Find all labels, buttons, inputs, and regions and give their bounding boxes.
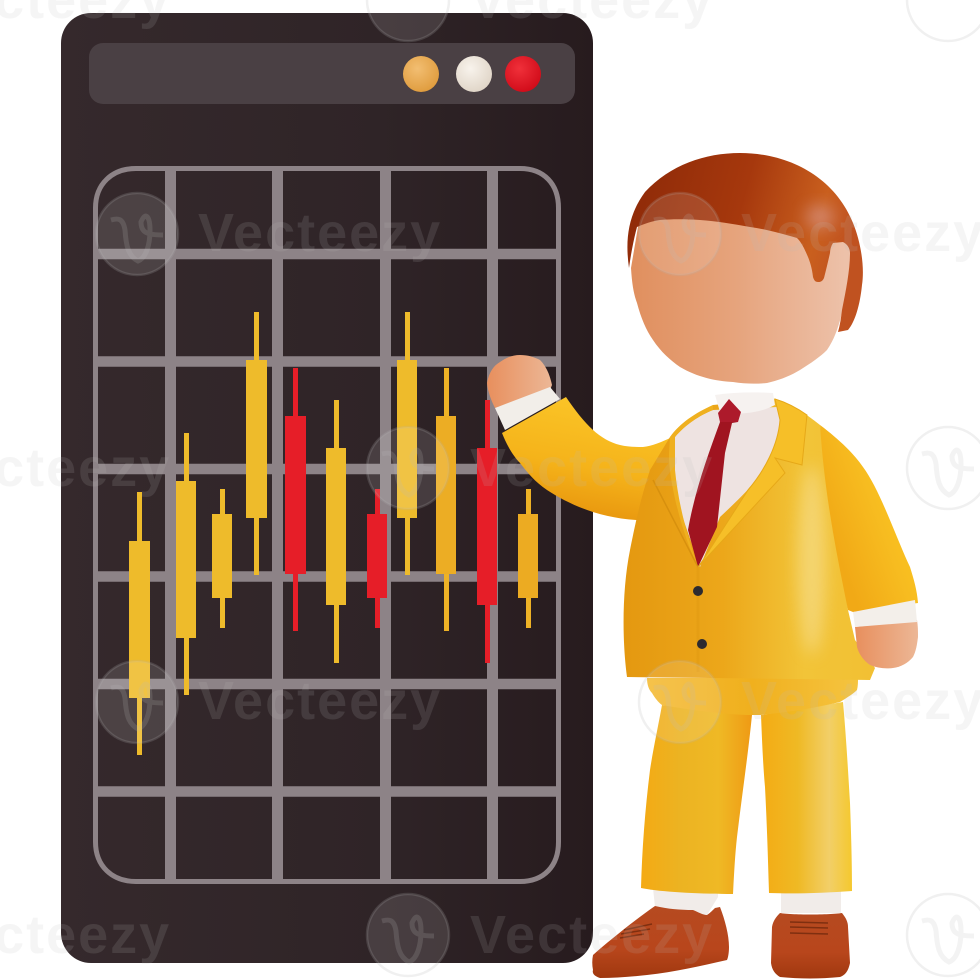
icon: white window dot (456, 56, 492, 92)
jacket lapels (653, 399, 807, 567)
watermarks: Vecteezy (470, 905, 714, 965)
panel: dark device screen (61, 13, 593, 963)
head (631, 215, 853, 384)
left shirt cuff (495, 387, 560, 430)
jacket buttons (693, 586, 707, 649)
character: businessman (487, 153, 918, 978)
watermarks: Vecteezy (198, 671, 442, 731)
candlestick chart (129, 312, 538, 755)
watermarks: Vecteezy (470, 438, 714, 498)
chart grid (96, 168, 559, 882)
right arm sleeve (820, 425, 918, 612)
left arm sleeve pointing at chart (502, 397, 672, 520)
white shirt (673, 407, 780, 567)
hair (627, 153, 863, 332)
watermarks: Vecteezy (741, 203, 980, 263)
icon: orange window dot (403, 56, 439, 92)
right shoe (771, 913, 850, 978)
icon: red window dot (505, 56, 541, 92)
white socks (653, 888, 841, 915)
left hand (487, 355, 552, 408)
suit jacket (624, 399, 875, 680)
left shoe (592, 906, 729, 978)
right hand (855, 620, 918, 668)
red necktie (688, 399, 741, 567)
shirt collar (715, 392, 775, 414)
watermarks: Vecteezy (198, 203, 442, 263)
watermarks: Vecteezy (741, 671, 980, 731)
trousers (641, 678, 858, 894)
panel: window title bar (89, 43, 575, 104)
right shirt cuff (853, 600, 917, 627)
